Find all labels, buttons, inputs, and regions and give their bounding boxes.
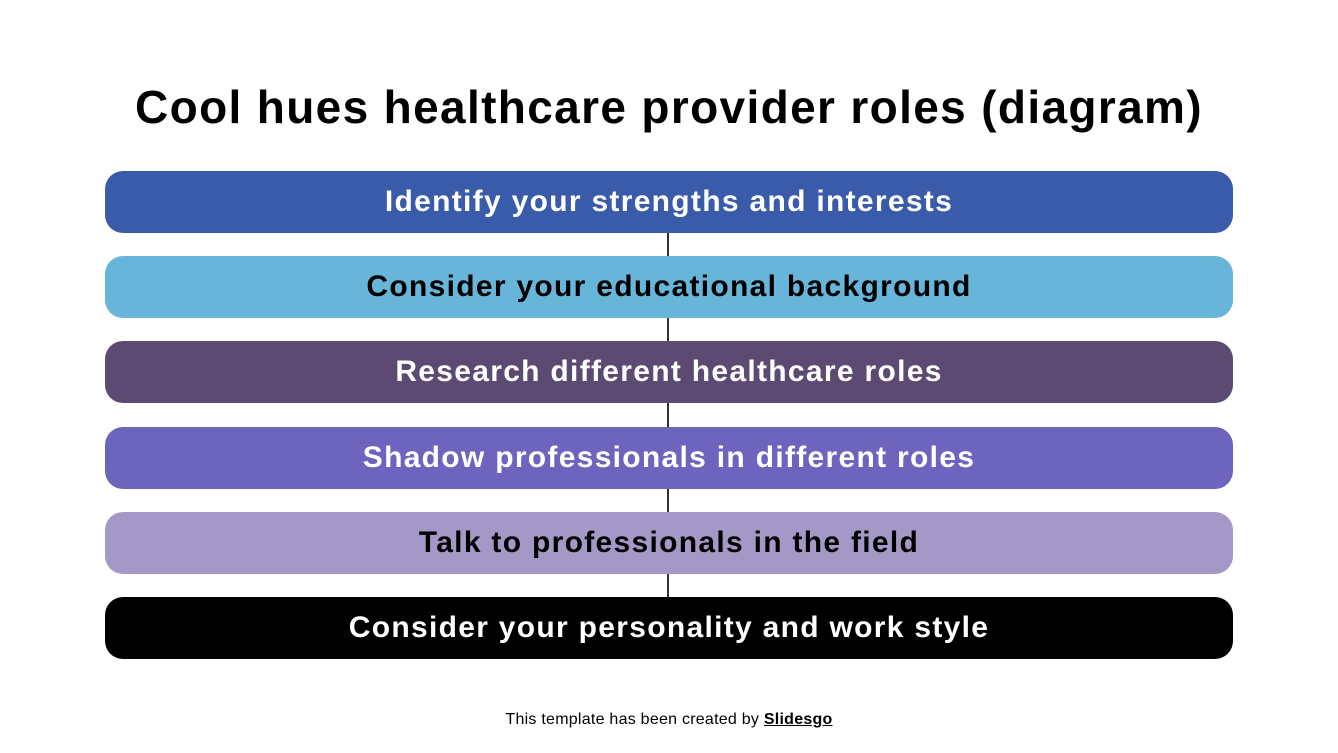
- bar 4: [105, 427, 1233, 489]
- bar 1: Identify your strengths and interests: [385, 185, 953, 218]
- bar 5: [105, 512, 1233, 574]
- bar 2: [105, 256, 1233, 318]
- bar 3: Research different healthcare roles: [395, 355, 943, 388]
- footer: This template has been created by Slidesgo: [505, 711, 833, 728]
- bar 5: Talk to professionals in the field: [419, 526, 919, 559]
- bar 2: Consider your educational background: [366, 270, 972, 303]
- bar 4: Shadow professionals in different roles: [363, 441, 975, 474]
- bar 1: [105, 171, 1233, 233]
- connector line: [667, 200, 669, 630]
- bar 6: [105, 597, 1233, 659]
- title: Cool hues healthcare provider roles (diagram): [135, 81, 1203, 133]
- bar 6: Consider your personality and work style: [349, 611, 989, 644]
- bar 3: [105, 341, 1233, 403]
